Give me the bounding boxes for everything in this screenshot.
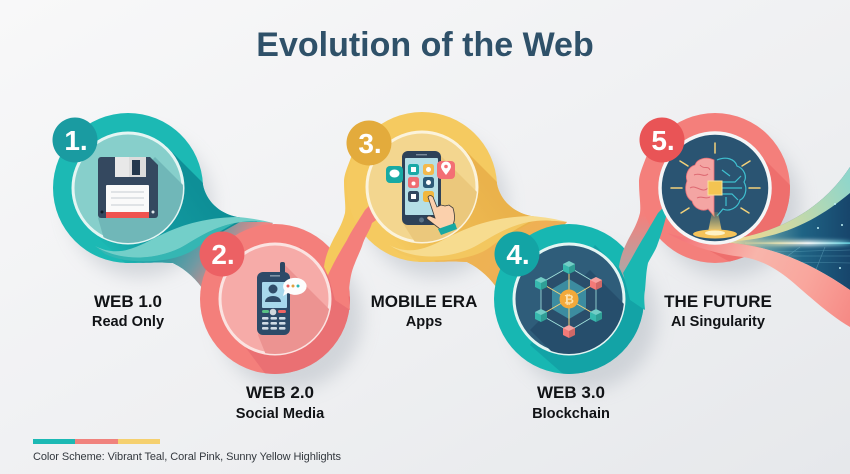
label: THE FUTURE: AI Singularity (671, 314, 766, 330)
step 4: blockchain circle (494, 232, 630, 360)
legend: colour bars (33, 439, 160, 444)
label: WEB 2.0 (236, 383, 325, 422)
blob: teal step 4 (494, 224, 644, 374)
badge 4: 4. (506, 239, 530, 270)
step 3: smartphone apps circle (346, 120, 478, 244)
badge 5: 5. (651, 125, 675, 156)
label: THE FUTURE: THE FUTURE (664, 292, 772, 311)
label: WEB 3.0: WEB 3.0 (537, 383, 605, 402)
label: WEB 3.0: Blockchain (532, 406, 610, 422)
badge 3: 3. (358, 128, 382, 159)
badge 1 (52, 118, 98, 162)
icon: AI brain (671, 143, 760, 238)
icon: mobile phone (257, 262, 307, 335)
ribbon: coral arm from step 2 to step 3 (328, 190, 390, 310)
label: THE FUTURE (664, 292, 772, 330)
ribbon: yellow blob step 3 with arm (324, 112, 574, 299)
label: MOBILE ERA (371, 292, 477, 330)
icon: blockchain network: ₿ (564, 292, 574, 306)
step 1: floppy disk circle (52, 118, 184, 244)
label: MOBILE ERA: MOBILE ERA (371, 292, 477, 311)
label: WEB 1.0: Read Only (92, 314, 165, 330)
ribbon: teal blob step 1 (53, 113, 280, 300)
streak: glowing data stream (727, 167, 850, 290)
label: WEB 3.0 (532, 383, 610, 422)
blob: coral step 2 (200, 224, 350, 374)
badge 2 (200, 232, 244, 276)
badge 1: 1. (64, 125, 88, 156)
step 5: AI brain circle (640, 118, 770, 243)
soft shadows under ribbon (68, 133, 800, 390)
title: Evolution of the Web (256, 26, 594, 64)
label: WEB 2.0: Social Media (236, 406, 325, 422)
badge 3 (346, 120, 392, 166)
legend: colour scheme caption: Color Scheme: Vibrant Teal, Coral Pink, Sunny Yellow Highlights (33, 451, 342, 463)
badge 2: 2. (211, 239, 235, 270)
step 2: mobile phone circle (200, 232, 332, 356)
label: WEB 1.0 (92, 292, 165, 330)
ribbon: teal arm from step 4 to step 5 (623, 190, 685, 310)
label: WEB 2.0: WEB 2.0 (246, 383, 314, 402)
ribbon: coral blob step 5 with arm and lower ribbon (619, 113, 850, 327)
icon: floppy disk (98, 157, 158, 218)
label: MOBILE ERA: Apps (406, 314, 442, 330)
label: WEB 1.0: WEB 1.0 (94, 292, 162, 311)
icon: smartphone with apps (386, 151, 457, 235)
